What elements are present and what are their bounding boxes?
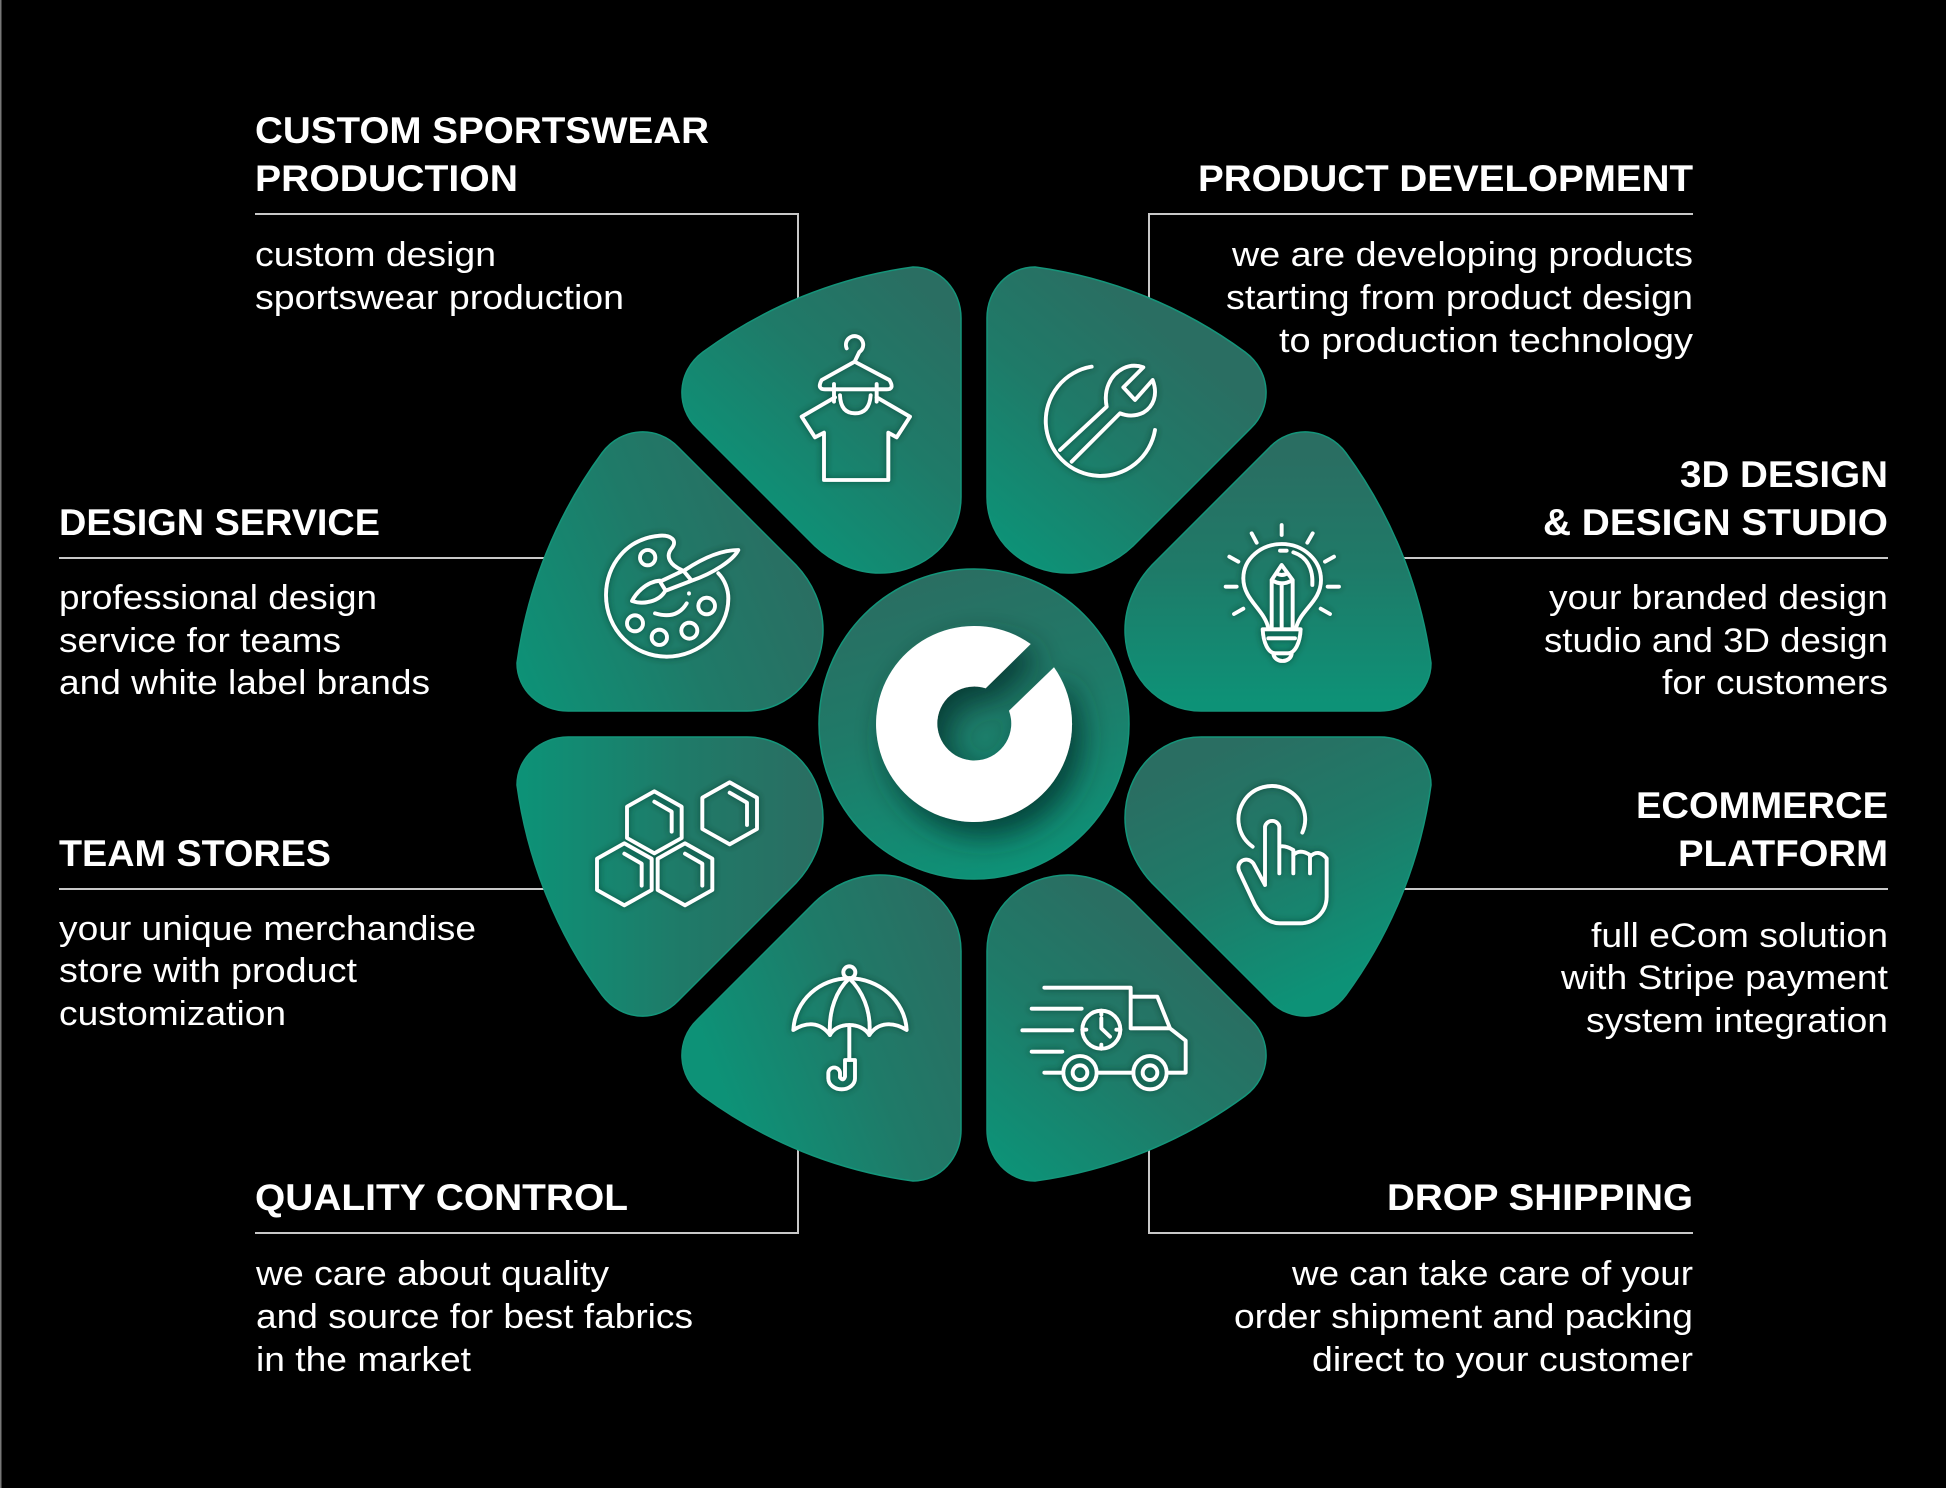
description: to production technology [1279,322,1693,360]
label: quality control [255,1150,798,1379]
description: studio and 3D design [1544,622,1888,660]
description: we are developing products [1231,236,1693,274]
panel: product development petal [987,267,1266,573]
description [59,910,476,1033]
heading [255,110,709,199]
heading: QUALITY CONTROL [255,1177,628,1218]
description [59,579,430,702]
label: team stores [59,833,544,1033]
heading: PLATFORM [1678,833,1888,874]
heading: & DESIGN STUDIO [1543,502,1888,543]
panel: ecommerce petal [1125,737,1431,1016]
petal shape [987,875,1266,1181]
description: your unique merchandise [59,910,476,948]
heading: PRODUCTION [255,158,518,199]
connector line [59,888,544,890]
petal shape [517,737,823,1016]
panel: custom sportswear petal [682,267,961,573]
icon: light bulb with pencil [1226,525,1339,661]
description [1544,579,1888,702]
connector line [1149,214,1693,298]
panel: design service petal [517,432,823,711]
panel: 3d design petal [1125,432,1431,711]
description: in the market [256,1341,472,1379]
description [255,1255,693,1379]
description: order shipment and packing [1234,1298,1693,1336]
description: store with product [59,952,358,990]
heading [1543,454,1888,543]
description [1560,917,1889,1040]
icon: paint palette and brush [606,536,738,657]
description: for customers [1662,664,1888,702]
icon: delivery truck with clock [1022,988,1186,1089]
disc [819,569,1129,879]
panel: quality control petal [682,875,961,1181]
description: custom design [255,236,496,274]
petal shape [517,432,823,711]
description: sportswear production [255,279,624,317]
icon: shirt on hanger [802,336,910,480]
heading: DROP SHIPPING [1387,1177,1693,1218]
description: and white label brands [59,664,430,702]
description [1226,236,1693,360]
description [255,236,624,317]
petal shape [682,267,961,573]
description: system integration [1586,1002,1888,1040]
description: and source for best fabrics [256,1298,693,1336]
icon: umbrella [793,966,907,1089]
petal shape [682,875,961,1181]
petal shape [1125,432,1431,711]
heading: TEAM STORES [59,833,331,874]
description: full eCom solution [1591,917,1888,955]
description: professional design [59,579,377,617]
petal shape [987,267,1266,573]
heading: PRODUCT DEVELOPMENT [1198,158,1693,199]
heading [1636,785,1888,874]
connector line [1404,557,1888,559]
description: we can take care of your [1291,1255,1693,1293]
label: design service [59,502,544,702]
icon: white c-shaped logo [876,626,1072,822]
icon: hexagons [597,782,757,905]
icon: wrench in circle [1046,366,1155,476]
icon: tapping hand [1238,786,1327,923]
description [1234,1255,1693,1379]
heading: CUSTOM SPORTSWEAR [255,110,709,151]
heading: DESIGN SERVICE [59,502,380,543]
label: custom sportswear production [255,110,798,317]
label: product development [1149,158,1693,360]
panel: central logo disc [819,569,1129,879]
heading: 3D DESIGN [1680,454,1888,495]
connector line [255,1150,798,1233]
connector line [1149,1150,1693,1233]
description: starting from product design [1226,279,1693,317]
description: service for teams [59,622,341,660]
description: customization [59,995,286,1033]
description: we care about quality [255,1255,609,1293]
heading: ECOMMERCE [1636,785,1888,826]
connector line [1404,888,1888,890]
petal shape [1125,737,1431,1016]
description: your branded design [1549,579,1888,617]
panel: drop shipping petal [987,875,1266,1181]
description: with Stripe payment [1560,959,1889,997]
description: direct to your customer [1312,1341,1693,1379]
label: 3d design and design studio [1404,454,1888,702]
label: ecommerce platform [1404,785,1889,1040]
connector line [255,214,798,298]
connector line [59,557,544,559]
label: drop shipping [1149,1150,1693,1379]
panel: team stores petal [517,737,823,1016]
